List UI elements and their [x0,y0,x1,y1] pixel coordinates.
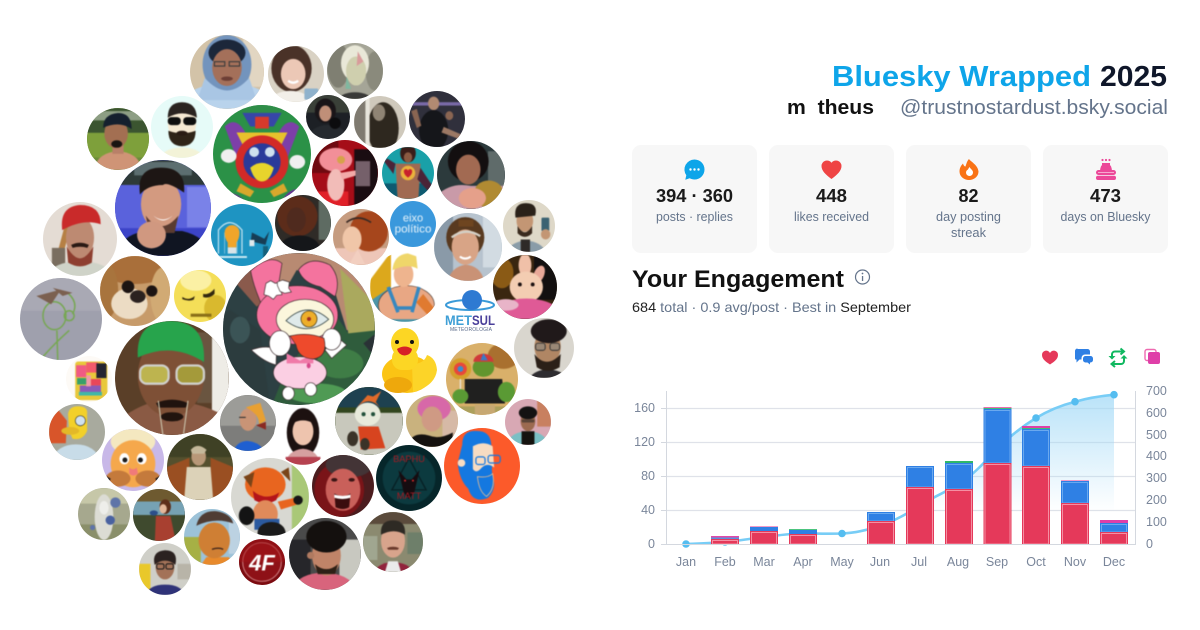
axes [661,391,1136,544]
avatar: person with glasses [139,543,191,595]
avatar: red-haired painting [333,209,389,265]
avatar: sacred heart figure [382,147,434,199]
avatar: man in red cap [43,202,117,276]
avatar: Simpsons character [49,404,105,460]
right axis labels: 300 [1146,471,1167,485]
icon: info [856,270,870,284]
stat card: posts and replies [632,145,757,253]
left axis labels: 160 [634,401,655,415]
avatar: clown clock mascot [213,105,311,203]
month labels: Apr [793,555,813,569]
avatar: 4F logo [239,539,285,585]
avatar: dark goat pentagram logo [376,445,442,511]
engagement heading: Your Engagement [632,266,844,293]
avatar: bearded man taking selfie [503,200,555,252]
avatar: dark goat pentagram logo: BAPHU [393,454,425,464]
avatar: colourful doodle face [66,356,112,402]
right axis labels: 0 [1146,537,1153,551]
month labels [676,555,1125,569]
month labels: Mar [753,555,775,569]
stacked bars [711,407,1128,544]
month labels: Sep [986,555,1008,569]
right axis labels: 100 [1146,515,1167,529]
avatar: MetSul logo [445,290,495,332]
avatar: pink cyclops My Melody cartoon [223,253,375,405]
right axis labels: 700 [1146,384,1167,398]
icon: replies legend chat [1075,348,1093,364]
stat card: days on Bluesky: 473 [1090,185,1121,206]
avatar: monochrome long-haired figure [354,96,406,148]
line: cumulative engagement [686,395,1114,544]
icon: speech bubble [684,159,705,180]
avatar: woman with black cat [306,95,350,139]
legend [1042,348,1160,367]
avatar: pink bunny plush [493,255,557,319]
avatar: man in flat cap [184,509,240,565]
stat card: likes received [769,145,894,253]
avatar: Little My cartoon [335,387,403,455]
bar: Jun [867,512,895,544]
avatar: man in black sunglasses [151,96,213,158]
bar: Nov [1061,480,1089,544]
stat card: day posting streak [906,145,1031,253]
avatar: eixo politico logo: eixo [403,213,423,225]
avatar: woman with headband [434,213,502,281]
stat card: likes received: 448 [816,185,847,206]
avatar: man in blue hoodie [190,35,264,109]
left axis labels [634,401,655,551]
right axis labels [1146,384,1167,551]
icon: flame [960,159,978,180]
avatar: muscular blond cartoon [370,252,440,322]
avatar: curly-haired woman [275,195,331,251]
avatar: pale painted portrait [327,43,383,99]
stat card: posts and replies: 394 · 360 [656,185,733,206]
avatar: cartoon orange face [102,429,164,491]
avatar: orange circle with blue bearded logo [444,428,520,504]
month labels: Nov [1064,555,1087,569]
bar: Aug [945,461,973,544]
avatar: smiling woman [268,46,324,102]
avatar: dark goat pentagram logo: MATT [397,491,422,501]
avatar: white statue with blue flowers [78,488,130,540]
avatar: 4F logo: 4F [248,550,275,575]
stat card: likes received: likes received [794,210,869,224]
avatar cloud [20,35,574,595]
month labels: Jan [676,555,696,569]
engagement summary: 684 total · 0.9 avg/post · Best in September [632,299,911,315]
avatar: Crash Bandicoot plush [231,458,309,536]
engagement chart [634,384,1167,569]
grid lines [666,408,1135,510]
right axis labels: 500 [1146,428,1167,442]
bar: Mar [750,526,778,544]
month labels: Jul [911,555,927,569]
avatar: man with curly hair and glasses [514,318,574,378]
avatar: woman with long black hair [274,407,332,465]
month labels: Oct [1026,555,1046,569]
month labels: Feb [714,555,736,569]
avatar: green stick-figure drawing [20,278,102,360]
avatar: old painted portrait [167,434,233,500]
left axis labels: 0 [648,537,655,551]
month labels: Jun [870,555,890,569]
bar: Jul [906,466,934,544]
icon: heart [821,160,842,179]
avatar: girl holding pig plush [437,141,505,209]
avatar: MetSul logo: MET [445,312,472,328]
icon: likes legend heart [1042,351,1058,364]
stat card: days on Bluesky [1043,145,1168,253]
icon: quotes legend copies [1145,350,1160,364]
right axis labels: 400 [1146,449,1167,463]
stat card: day posting streak: day posting [936,210,1001,224]
display name and handle: m theus [787,97,874,119]
avatar: man in cap on grass [87,108,149,170]
bar: Dec [1100,520,1128,544]
month labels: Aug [947,555,969,569]
title: Bluesky Wrapped [832,61,1091,93]
line data points [682,391,1118,548]
avatar: small long-haired dog [100,256,170,326]
left axis labels: 120 [634,435,655,449]
avatar: lightbulb in cage illustration [211,204,273,266]
right axis labels: 600 [1146,406,1167,420]
stat card: day posting streak: streak [951,226,987,240]
bar: Feb [711,536,739,544]
display name and handle [787,97,1168,119]
bar: Sep [984,407,1012,544]
avatar: woman screaming in red light [312,455,374,517]
icon: reposts legend arrows [1108,348,1128,367]
avatar: soccer players [409,91,465,147]
display name and handle: @trustnostardust.bsky.social [900,97,1168,119]
stat card: posts and replies: posts · replies [656,210,733,224]
month labels: Dec [1103,555,1125,569]
bar: Oct [1022,426,1050,544]
bar: Apr [789,529,817,544]
month labels: May [830,555,855,569]
avatar: man with green bandana and mirrored glasses [115,321,229,435]
area: cumulative engagement fill [686,395,1114,544]
left axis labels: 40 [641,503,655,517]
title: 2025 [1100,61,1167,93]
stat card: days on Bluesky: days on Bluesky [1060,210,1151,224]
avatar: yellow face with lashes [174,270,226,322]
right axis labels: 200 [1146,493,1167,507]
avatar: orc with lollipop [446,343,518,415]
avatar: eixo politico logo: político [395,223,431,235]
avatar: smiling man on blue backdrop [115,160,211,256]
avatar: woman with pink hair [406,395,458,447]
avatar: pre-Raphaelite woman painting [133,489,185,541]
avatar: man in patterned shirt [505,399,551,445]
avatar: rubber duck [382,328,437,393]
left axis labels: 80 [641,469,655,483]
avatar: pink figure on red [312,140,378,206]
avatar: man in orange backward cap [220,395,276,451]
stat card: day posting streak: 82 [958,185,978,206]
avatar: eixo politico logo [390,201,436,247]
avatar: man with curly hair frowning [289,518,361,590]
icon: cake [1096,159,1116,180]
avatar: man with moustache outdoors [363,512,423,572]
